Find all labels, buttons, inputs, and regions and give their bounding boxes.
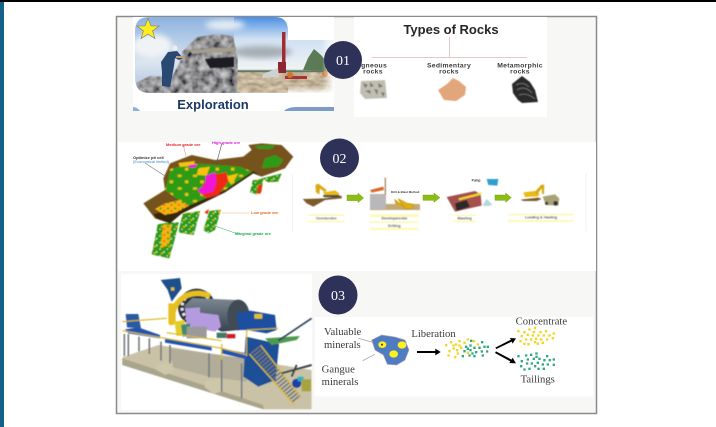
step: development drilling label [370,214,419,230]
label: metamorphic rocks: rocks [510,68,530,76]
pit brown body [143,143,293,223]
small motors [174,320,188,336]
blue deck pieces [125,327,247,359]
arrow: liberation [417,349,441,355]
gangue minerals label: Gangue [322,364,355,375]
step: overburden label: Overburden [316,217,337,221]
concentrate label: Concentrate [516,317,567,328]
label: marginal grade: Marginal grade ore [235,231,272,236]
top black edge [0,0,716,2]
slide remnant left [133,107,140,111]
ore surface [165,163,252,206]
geologist figure [161,45,184,87]
concrete foundation [170,348,247,382]
stairs [255,349,298,401]
mill ring gear [178,289,215,326]
panel: exploration [132,17,334,112]
label: medium grade: Medium grade ore [166,142,201,147]
tailings label: Tailings [521,374,555,385]
icon: yellow star [137,18,159,38]
panel: types of rocks [354,17,547,117]
hanging ore columns [152,173,282,258]
arrow: overburden to development [347,193,364,203]
label: sedimentary rocks: Sedimentary [427,62,471,70]
discharge platform [265,336,300,345]
process flow diagram [293,173,586,232]
types of rocks title: Types of Rocks [403,22,499,37]
purple gearbox [185,307,221,332]
panel: row 2 background [118,142,596,271]
step: blasting [447,179,498,212]
ore upper right [262,155,283,168]
arrow: to concentrate [495,338,516,349]
red and green accents [217,333,227,338]
mixed particles [445,338,489,358]
badge 03: 03 [331,289,345,304]
left blue sidebar [0,2,4,427]
step: development drilling label: Drilling [388,224,401,228]
step: blasting label [453,214,476,222]
label: igneous rocks: rocks [363,68,383,76]
arrow: to tailings [495,351,516,363]
pit dark shaded face [153,171,262,223]
stair rails [249,345,300,405]
slab front edge [122,358,263,409]
step: drilling [370,178,420,210]
label: sedimentary rocks: rocks [439,68,459,76]
ore lower left [155,200,189,215]
pump label: Pump [472,179,480,183]
step: blasting label: Blasting [457,217,472,221]
label: economic limit: (Economical limited) [133,159,170,164]
label: metamorphic rocks: Metamorphic [497,62,543,70]
ore top lobe [255,145,275,149]
badge 01: 01 [336,54,350,69]
tree connector lines [372,37,527,58]
leader lines [358,338,379,361]
concentrate particles [517,327,555,345]
badge 01 [324,41,362,79]
feed chute [161,278,182,302]
ore model leader lines [145,143,249,233]
exploration photo [132,17,334,93]
badge 02 [320,138,359,178]
valuable minerals label: minerals [324,340,361,351]
top grade magenta patches [188,164,217,194]
support columns [124,334,258,398]
control cabinet [126,314,141,328]
ore particle [372,335,409,365]
blue cone [243,337,279,387]
photo right and bottom fade [288,17,334,95]
step: loading label: Loading & Hauling [525,216,557,220]
label: optimum pit: Optimize pit cell [133,155,164,160]
step: overburden label [308,214,345,222]
panel: liberation diagram [315,317,593,396]
pump assembly [282,365,312,377]
badge 03 [318,276,358,314]
ore model labels [133,140,279,236]
label: igneous rocks: Igneous [359,62,387,70]
concrete floor slab [122,345,312,409]
exploration heading: Exploration [177,97,249,112]
mill drum [184,298,239,332]
liberation label: Liberation [411,329,456,340]
label: high grade: High grade ore [212,140,241,145]
drill and blast label: Drill & Blast Method [391,190,420,194]
main figure frame [116,16,596,414]
blue motor housing [237,311,277,333]
yellow upper patches [178,161,238,185]
arrow: development to blasting [423,193,440,202]
step: development drilling label: Developmental [381,217,407,221]
valuable minerals label: Valuable [324,327,362,338]
slide remnant right [284,107,334,111]
step: loading and hauling [521,184,559,206]
gangue minerals label: minerals [322,377,358,388]
panel: grinding mill image [121,274,312,410]
step: overburden [303,184,342,207]
high grade red patches [198,172,228,198]
chart: ore body block model [143,143,293,258]
badge 02: 02 [332,152,346,167]
tailings particles [517,352,555,371]
drill rig [262,32,328,79]
step: loading label [508,214,574,222]
flow frame edges [293,173,586,232]
icon: metamorphic rock [512,76,538,103]
icon: sedimentary rock [438,78,466,101]
arrow: blasting to loading [495,193,511,202]
icon: igneous rock [360,80,387,99]
label: low grade: Low grade ore [251,210,279,215]
yellow handrails [122,318,278,360]
